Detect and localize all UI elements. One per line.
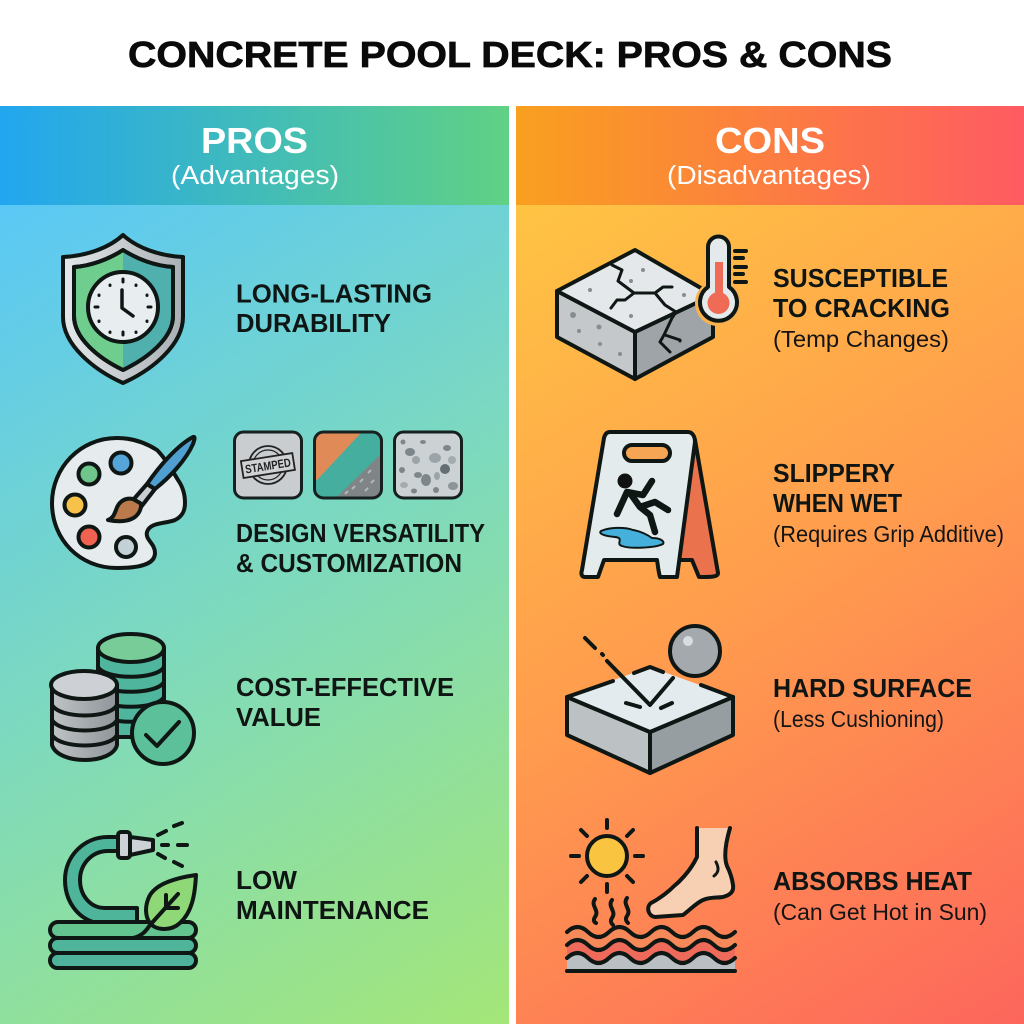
pros header band: PROS: [201, 120, 308, 161]
icon: sun, foot and hot surface: [567, 820, 735, 971]
cons header band: CONS: [715, 120, 825, 161]
label: cost-effective value: VALUE: [236, 702, 321, 732]
panel: cons: [516, 106, 1024, 1024]
label: design versatility: DESIGN VERSATILITY: [236, 518, 485, 548]
label: slippery: [773, 458, 1004, 547]
icon: coin stacks with check: [51, 634, 194, 764]
panel: pros: [0, 106, 509, 1024]
icon: cracked concrete and thermometer: [557, 236, 746, 379]
label: cost-effective value: [236, 672, 454, 732]
label: design versatility: & CUSTOMIZATION: [236, 548, 462, 578]
label: hard surface: HARD SURFACE: [773, 673, 972, 703]
label: low maintenance: [236, 865, 429, 925]
label: cracking: SUSCEPTIBLE: [773, 263, 948, 293]
icon: wet floor sign: [581, 432, 718, 577]
title: CONCRETE POOL DECK: PROS & CONS: [128, 34, 892, 75]
label: absorbs heat: [773, 866, 987, 925]
label: slippery: WHEN WET: [773, 488, 902, 518]
label: slippery: (Requires Grip Additive): [773, 521, 1004, 547]
label: design versatility: [236, 518, 485, 578]
label: durability: [236, 278, 432, 338]
icon: hard surface with ball: [567, 626, 733, 773]
label: durability: LONG-LASTING: [236, 278, 432, 308]
label: slippery: SLIPPERY: [773, 458, 895, 488]
swatch: stamped concrete: STAMPED: [244, 455, 292, 477]
label: cost-effective value: COST-EFFECTIVE: [236, 672, 454, 702]
icon: palette and brush: [52, 437, 195, 568]
pros header band: [0, 106, 509, 205]
swatch: color bands: [314, 432, 382, 498]
pros header band: (Advantages): [171, 162, 339, 190]
label: cracking: [773, 263, 950, 352]
label: low maintenance: MAINTENANCE: [236, 895, 429, 925]
material swatches: [234, 432, 462, 498]
label: cracking: TO CRACKING: [773, 293, 950, 323]
label: absorbs heat: ABSORBS HEAT: [773, 866, 972, 896]
cons header band: [516, 106, 1024, 205]
icon: hose with leaf: [50, 823, 196, 968]
label: low maintenance: LOW: [236, 865, 297, 895]
label: hard surface: [773, 673, 972, 732]
cons header band: (Disadvantages): [667, 162, 871, 190]
swatch: stamped concrete: [234, 432, 302, 498]
icon: shield with clock: [63, 235, 183, 383]
label: durability: DURABILITY: [236, 308, 391, 338]
label: absorbs heat: (Can Get Hot in Sun): [773, 899, 987, 925]
label: hard surface: (Less Cushioning): [773, 706, 944, 732]
swatch: exposed aggregate: [394, 432, 462, 498]
label: cracking: (Temp Changes): [773, 326, 949, 352]
